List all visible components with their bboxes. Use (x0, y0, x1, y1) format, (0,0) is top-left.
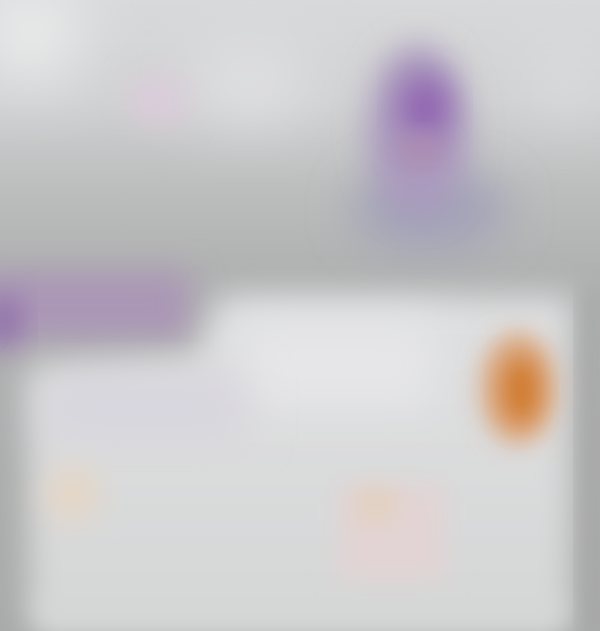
figure chin accent (396, 136, 444, 164)
pink header blob (130, 76, 186, 124)
orange circle badge (480, 332, 556, 444)
card fill (338, 485, 446, 580)
figure body (352, 170, 508, 250)
purple figure (352, 45, 508, 250)
figure halo (368, 45, 468, 215)
top light band (0, 0, 595, 115)
bottom panel fill (40, 600, 560, 631)
badge core (502, 356, 540, 424)
panel lavender tint (45, 375, 245, 440)
right edge shadow (582, 290, 600, 631)
figure head (401, 76, 449, 140)
left orange icon (46, 468, 98, 520)
banner left accent (0, 296, 20, 348)
pink card (338, 485, 446, 580)
purple side banner (0, 272, 190, 348)
panel highlight (240, 320, 435, 410)
main content panel (28, 296, 572, 631)
banner band (0, 272, 190, 338)
card peach accent (354, 487, 398, 523)
badge halo (480, 332, 556, 444)
